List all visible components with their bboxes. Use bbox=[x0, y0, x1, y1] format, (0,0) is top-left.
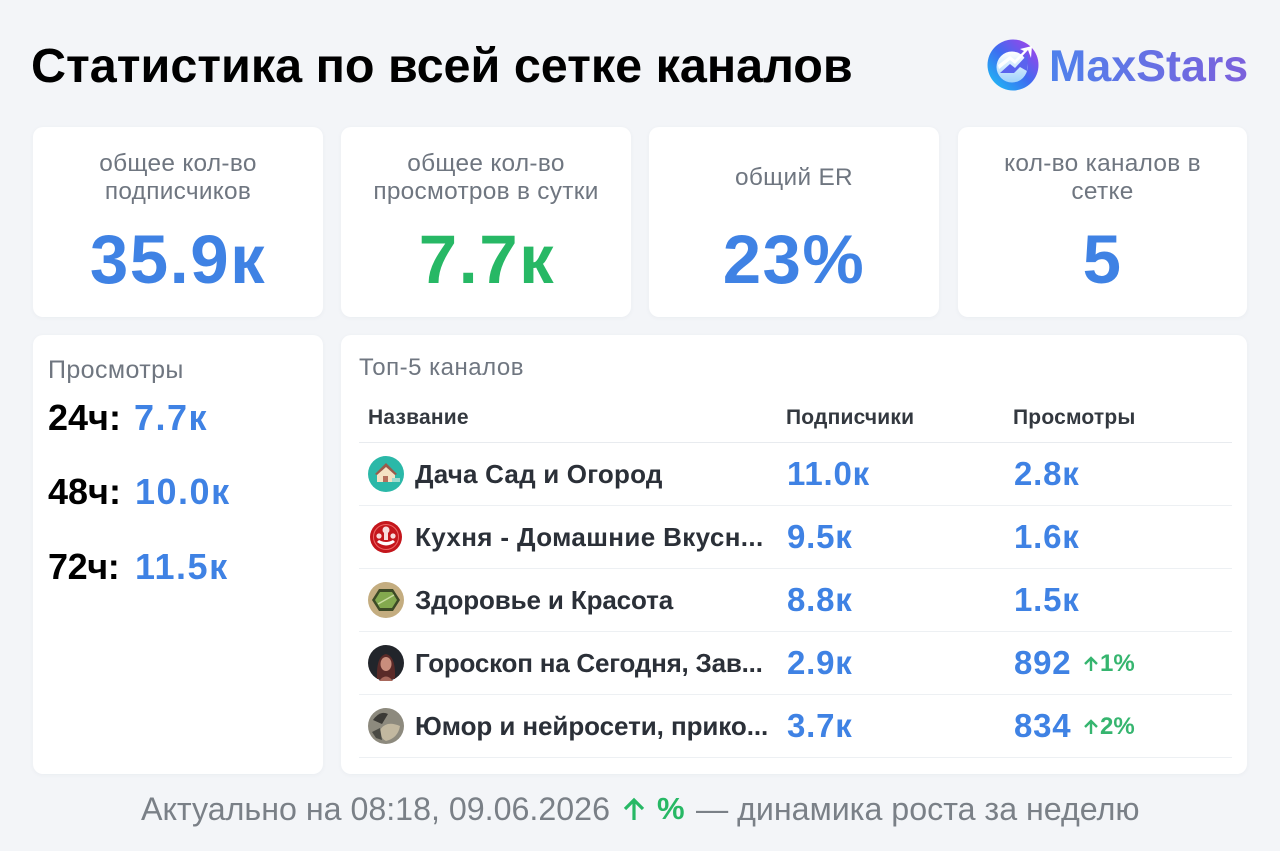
value: 35.9к bbox=[90, 221, 266, 298]
subscribers: 9.5к bbox=[787, 518, 853, 555]
growth bbox=[1084, 713, 1135, 740]
panel: daily views bbox=[341, 127, 631, 317]
label: кол-во каналов в bbox=[1004, 150, 1201, 177]
views 72h: 72ч: bbox=[48, 546, 119, 587]
column: name: Название bbox=[368, 406, 469, 429]
icon: portrait avatar bbox=[368, 645, 404, 681]
icon: house avatar bbox=[368, 456, 404, 492]
panel: top 5 channels bbox=[341, 335, 1247, 774]
value: 7.7к bbox=[419, 221, 555, 298]
views: 1.6к bbox=[1014, 518, 1080, 555]
subscribers: 2.9к bbox=[787, 644, 853, 681]
growth bbox=[1084, 650, 1135, 677]
heading: Просмотры bbox=[48, 356, 184, 384]
row 5 bbox=[359, 694, 1232, 758]
views 24h bbox=[48, 397, 208, 438]
footer note bbox=[141, 791, 1140, 827]
views 24h: 7.7к bbox=[134, 397, 208, 438]
label: общее кол-во bbox=[99, 150, 257, 177]
panel: subscribers bbox=[33, 127, 323, 317]
views 48h: 10.0к bbox=[135, 471, 231, 512]
column: subscribers: Подписчики bbox=[786, 406, 914, 429]
footer note: % bbox=[657, 791, 685, 826]
icon: logo circle bbox=[988, 40, 1038, 90]
views 72h bbox=[48, 546, 229, 587]
footer note: Актуально на 08:18, 09.06.2026 bbox=[141, 791, 610, 827]
growth: 2% bbox=[1100, 713, 1135, 740]
title: Статистика по всей сетке каналов bbox=[31, 39, 853, 93]
heading: Топ-5 каналов bbox=[359, 354, 524, 381]
views 24h: 24ч: bbox=[48, 397, 121, 438]
subscribers: 8.8к bbox=[787, 581, 853, 618]
column: views: Просмотры bbox=[1013, 406, 1136, 429]
channel name: Дача Сад и Огород bbox=[415, 459, 663, 489]
row 4 bbox=[359, 631, 1232, 695]
subscribers: 3.7к bbox=[787, 707, 853, 744]
table header bbox=[359, 395, 1232, 443]
row 2 bbox=[359, 505, 1232, 569]
logo: MaxStars bbox=[988, 40, 1248, 91]
label bbox=[373, 150, 599, 205]
views: 834 bbox=[1014, 707, 1071, 744]
channel name: Кухня - Домашние Вкусн... bbox=[415, 522, 764, 552]
label: просмотров в сутки bbox=[373, 178, 599, 205]
icon: photo avatar bbox=[368, 708, 404, 744]
logo wordmark: MaxStars bbox=[1049, 41, 1248, 91]
icon: leaf avatar bbox=[368, 582, 404, 618]
views: 892 bbox=[1014, 644, 1071, 681]
value: 5 bbox=[1083, 221, 1122, 298]
label: общее кол-во bbox=[407, 150, 565, 177]
views: 1.5к bbox=[1014, 581, 1080, 618]
views 72h: 11.5к bbox=[135, 546, 229, 587]
label bbox=[99, 150, 257, 205]
views 48h bbox=[48, 471, 231, 512]
growth: 1% bbox=[1100, 650, 1135, 677]
views: 2.8к bbox=[1014, 455, 1080, 492]
row 1 bbox=[359, 442, 1232, 506]
label bbox=[1004, 150, 1201, 205]
value: 23% bbox=[723, 221, 865, 298]
subscribers: 11.0к bbox=[787, 455, 870, 492]
label: общий ER bbox=[735, 164, 853, 191]
label: подписчиков bbox=[105, 178, 251, 205]
channel name: Здоровье и Красота bbox=[415, 585, 673, 615]
channel name: Юмор и нейросети, прико... bbox=[415, 711, 768, 741]
label: сетке bbox=[1071, 178, 1134, 205]
panel: ER bbox=[649, 127, 939, 317]
footer note: — динамика роста за неделю bbox=[696, 791, 1140, 827]
icon: kitchen avatar bbox=[370, 521, 402, 553]
row 3 bbox=[359, 568, 1232, 632]
channel name: Гороскоп на Сегодня, Зав... bbox=[415, 648, 763, 678]
views 48h: 48ч: bbox=[48, 471, 121, 512]
panel: channels count bbox=[958, 127, 1247, 317]
panel: views bbox=[33, 335, 323, 774]
